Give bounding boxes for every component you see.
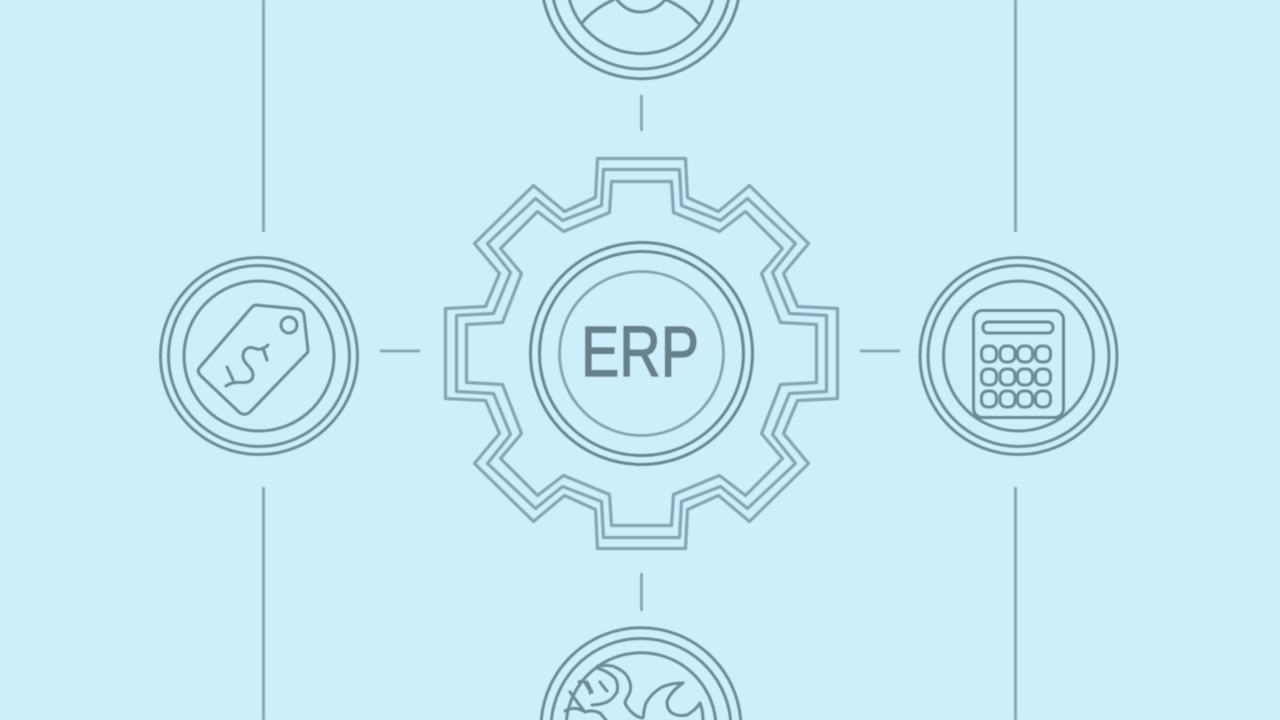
hub rings: [530, 242, 752, 464]
dollar sign: [226, 345, 268, 386]
scribbled marks: [565, 681, 607, 720]
calculator display: [983, 322, 1053, 333]
gear outline: inner: [466, 182, 816, 526]
gear: ERP central hub: [446, 158, 838, 548]
gear outline: outer: [446, 158, 838, 548]
icon: wrench badge (bottom): [541, 628, 741, 720]
calculator keys: [982, 346, 1050, 407]
icon: calculator badge (right): [920, 258, 1117, 454]
calculator body: [974, 310, 1064, 418]
icon: person badge (top): [544, 0, 738, 79]
price tag shape: [198, 305, 308, 414]
wrench outline: [598, 665, 703, 720]
wrench lower jaw: [592, 666, 618, 705]
gear outline: middle: [456, 170, 826, 538]
text: ERP: ERP: [581, 313, 699, 392]
connector lines: [264, 0, 1016, 720]
icon: price tag badge (left): [160, 258, 358, 454]
